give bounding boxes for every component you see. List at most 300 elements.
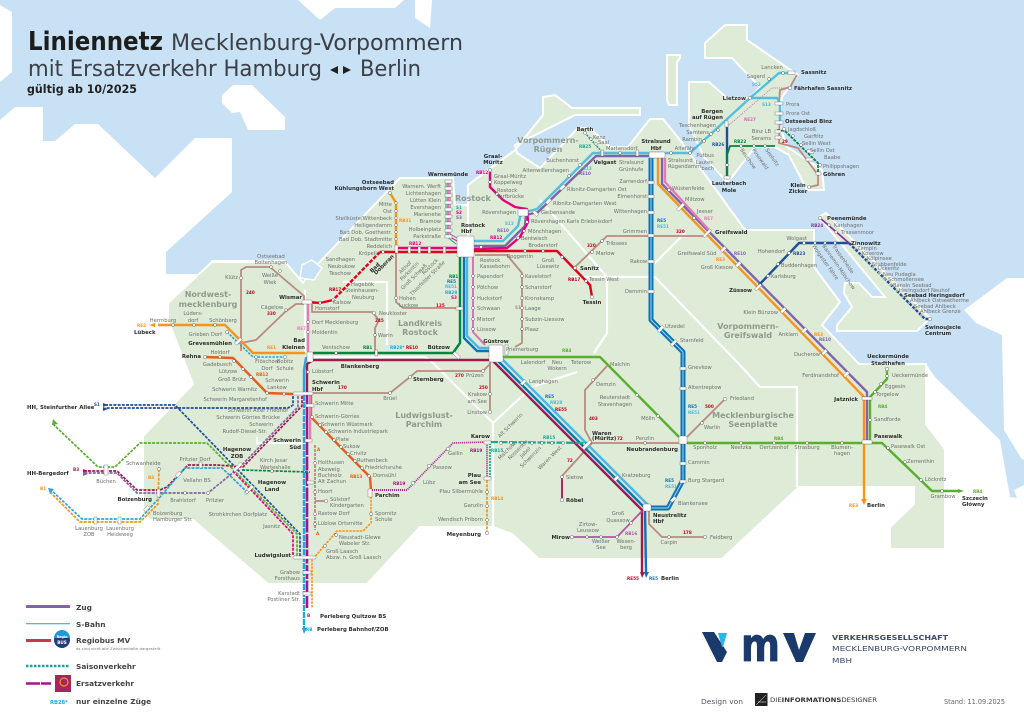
line: orange Lauenburg xyxy=(50,467,159,522)
station names: Schwerin Wüstmark xyxy=(321,422,373,428)
major station names: Zinnowitz xyxy=(851,241,881,247)
route numbers: RB4 xyxy=(562,348,571,353)
district names: Vorpommern- xyxy=(517,136,579,145)
station names: Rövershagen Karls Erlebnisdorf xyxy=(531,219,612,225)
route numbers: RB23 xyxy=(793,251,805,256)
station names: Torgelow xyxy=(875,392,900,398)
company name xyxy=(832,633,967,665)
route numbers: S13 xyxy=(762,102,771,107)
major station names: Hbf xyxy=(312,387,323,393)
major station names: Barth xyxy=(577,127,594,133)
station names: Seelvitz xyxy=(763,148,780,168)
station names: Warnem. Werft xyxy=(402,184,441,190)
line: Güstrow Neustrelitz red xyxy=(493,361,642,572)
station names: Jabel xyxy=(518,446,532,460)
major station names: Perleberg Quitzow BS xyxy=(320,614,386,620)
station names: Jeeser xyxy=(696,209,714,215)
station names: Kölpinsee xyxy=(867,256,892,262)
major station names: Bergen xyxy=(701,109,723,115)
station names: Altenwillershagen xyxy=(523,168,569,174)
major station names: HH, Steinfurther Allee xyxy=(27,405,95,411)
land: Mecklenburg-Vorpommern mainland xyxy=(143,95,945,584)
station names: Grimmen xyxy=(623,229,647,235)
station names: Utzedel xyxy=(665,324,685,330)
route numbers: 245 xyxy=(375,318,384,323)
line: Rostock Stralsund train xyxy=(474,156,649,246)
station names: Carpin xyxy=(661,540,677,546)
station names: Neetzka xyxy=(730,445,752,451)
major station names: Tessin xyxy=(583,300,602,306)
station names: Ostseebad xyxy=(257,254,285,260)
route numbers: A xyxy=(317,447,321,452)
route numbers: S13 xyxy=(505,221,514,226)
station names: Klein Bünzow xyxy=(743,310,779,316)
route numbers: S13 xyxy=(583,166,592,171)
station names: Brahlstorf xyxy=(170,498,196,504)
station names: Saal xyxy=(598,140,609,146)
station names: Graal-Müritz xyxy=(494,174,526,180)
station names: Plate xyxy=(336,437,349,443)
station names: Zarrendorf xyxy=(619,179,647,185)
major station names: Perleberg Bahnhof/ZOB xyxy=(317,627,389,633)
station names: Bansin Seebad xyxy=(893,283,932,289)
major station names: Lauterbach xyxy=(712,181,746,187)
station names: Lüssow xyxy=(477,327,497,333)
major station names: Güstrow xyxy=(483,339,509,345)
station names: Ganzlin xyxy=(464,503,483,509)
station names: Groß Schwaß xyxy=(400,262,429,291)
route numbers: RE51 xyxy=(665,484,677,489)
route numbers: RE10 xyxy=(819,337,831,342)
station names: Rostock xyxy=(497,188,517,194)
station names: Ahlbeck Grenze xyxy=(920,309,961,315)
station names: Steinhausen- xyxy=(345,288,379,294)
major station names: Parchim xyxy=(375,493,400,499)
station names: Mölln xyxy=(641,416,655,422)
route numbers: RB12 xyxy=(256,372,268,377)
station names: Zempin xyxy=(857,246,877,252)
legend: Regiobus MV: Regiobus MV xyxy=(76,636,130,645)
line: Barth xyxy=(585,133,602,152)
station names: Wiek xyxy=(264,280,276,286)
station names: Abzw. n. Groß Laasch xyxy=(326,555,381,561)
station names: Marlow xyxy=(596,251,615,257)
station names: Lübstorf xyxy=(312,369,333,375)
station names: Ahlbeck Ostseetherme xyxy=(910,298,969,304)
route numbers: 403 xyxy=(589,416,598,421)
station names: Prora xyxy=(786,102,800,108)
station names: Schwanheide xyxy=(126,461,161,467)
line: light blue Lauenburg xyxy=(50,468,247,519)
station names: Sietow xyxy=(566,475,584,481)
station names: Brüel xyxy=(383,396,397,402)
station names: Rostock xyxy=(480,258,500,264)
route numbers: 72 xyxy=(567,458,573,463)
line: Prora branch xyxy=(750,98,780,125)
major station names: Züssow xyxy=(729,288,752,294)
district names: Parchim xyxy=(406,420,442,429)
station names: Leussow xyxy=(577,528,600,534)
station names: Schwerin xyxy=(249,422,273,428)
route numbers: RE55 xyxy=(627,576,639,581)
line: Kühlungsborn xyxy=(390,193,396,247)
legend: Regiobus MV: es sind nicht alle Zwischenhalte dargestellt xyxy=(76,646,161,651)
arrows xyxy=(48,323,964,634)
route numbers: 29 xyxy=(782,139,788,144)
station names: Kindergarten xyxy=(330,503,364,509)
station names: Hohendorf xyxy=(758,249,785,255)
station names: Alt Schwerin xyxy=(497,412,524,439)
station names: Sukow xyxy=(343,444,361,450)
line: Rostock west pink xyxy=(396,247,457,249)
station names: Büchen xyxy=(96,479,116,485)
station names: Oertzenhof xyxy=(760,445,789,451)
line: Rostock west red xyxy=(380,251,457,253)
station names: Ferdinandshof xyxy=(802,373,839,379)
route numbers: RE3 xyxy=(849,503,858,508)
station names: Hornstorf xyxy=(315,306,339,312)
line: S-Bahn Rostock Stralsund xyxy=(474,73,795,241)
station names: Malchow xyxy=(497,441,518,461)
station names: Blumen- xyxy=(831,445,853,451)
line: Usedom xyxy=(759,243,849,285)
station names: Kavelstorf xyxy=(525,274,551,280)
station names: Elmenhorst xyxy=(617,194,647,200)
station names: Garftitz xyxy=(804,134,824,140)
major station names: Rostock xyxy=(461,223,486,229)
major station names: Swinoujscie xyxy=(925,325,961,331)
legend: Regiobus MV: Regio xyxy=(57,635,68,639)
station names: Pritzier Dorf xyxy=(180,457,211,463)
station names: Lalendorf xyxy=(521,360,545,366)
route numbers: RB28 xyxy=(445,290,457,295)
route numbers: RE5 xyxy=(688,404,697,409)
station names: Bad Dob. Goethestr. xyxy=(340,230,392,236)
station names: Sponholz xyxy=(693,445,717,451)
station names: Penzlin xyxy=(636,436,654,442)
district names: Rügen xyxy=(534,145,563,154)
station names: Cammin xyxy=(688,460,710,466)
major station names: am See xyxy=(459,480,481,486)
major station names: Bad xyxy=(369,262,382,274)
station names: Lancken xyxy=(761,65,783,71)
line: RE5 Stralsund Neustrelitz xyxy=(651,158,683,508)
station names: Karlshagen xyxy=(834,223,863,229)
major station names: Bützow xyxy=(428,345,450,351)
station names: Teschenhagen xyxy=(678,123,716,129)
station names: Schmollensee xyxy=(888,277,924,283)
station names: Hohen xyxy=(399,296,416,302)
station names: Gnevkow xyxy=(688,365,713,371)
station names: Sellin Ost xyxy=(810,148,835,154)
land: Usedom xyxy=(819,213,930,331)
route numbers: RE55 xyxy=(555,407,567,412)
station names: Wokern xyxy=(547,366,567,372)
line: Grieben xyxy=(227,332,285,357)
station names: Lankow xyxy=(267,385,288,391)
station names: Bad Dob. Stadtmitte xyxy=(339,237,392,243)
station names: Dorf Mecklenburg xyxy=(312,320,358,326)
station names: Posewald xyxy=(750,148,769,171)
line: Rehna xyxy=(205,357,293,394)
route numbers: RB13 xyxy=(350,474,362,479)
station names: Groß Brütz xyxy=(218,377,246,383)
route numbers: RB26 xyxy=(712,142,724,147)
station names: Wittenhagen xyxy=(614,209,647,215)
station names: Holthusen xyxy=(318,460,344,466)
station names: Plaaz xyxy=(525,327,539,333)
station names: Wesen- xyxy=(616,539,636,545)
design credit: Design von xyxy=(701,698,743,706)
route numbers: 170 xyxy=(338,385,347,390)
company name: MECKLENBURG-VORPOMMERN xyxy=(832,644,967,653)
station names: Lüblow Ortsmitte xyxy=(318,521,363,527)
route numbers: RB12 xyxy=(476,170,488,175)
station names: Tribsees xyxy=(605,241,627,247)
line: Usedom dashed xyxy=(849,243,930,319)
logo: VMV xyxy=(702,618,816,672)
route numbers: RE1 xyxy=(267,345,276,350)
route numbers: RB4 xyxy=(878,404,887,409)
title: Mecklenburg-Vorpommern xyxy=(171,31,463,56)
station names: Sagard xyxy=(747,74,765,80)
station names: Moidentin xyxy=(312,330,338,336)
station names: Kronskamp xyxy=(525,296,555,302)
station names: Pasewalk Ost xyxy=(891,444,925,450)
station names: Boltenhagen xyxy=(255,260,287,266)
station names: Schwerin Margaretenhof xyxy=(203,397,267,403)
route numbers: RE10 xyxy=(406,345,418,350)
major station names: Sternberg xyxy=(413,377,444,383)
station names: Rudolf-Diesel-Str. xyxy=(223,429,267,435)
route numbers: S3 xyxy=(456,215,462,220)
station names: Lübz xyxy=(423,480,435,486)
station names: Warteshalle xyxy=(260,465,291,471)
station names: Teterow xyxy=(570,360,592,366)
line: replacement magenta xyxy=(306,395,308,441)
major station names: ZOB xyxy=(231,454,243,460)
station names: Kenz xyxy=(593,135,606,141)
station names: Buchholz xyxy=(318,473,342,479)
title: mit Ersatzverkehr Hamburg xyxy=(28,57,322,82)
station names: Papendorf xyxy=(477,274,503,280)
route numbers: B3 xyxy=(148,475,154,480)
route numbers: RE5 xyxy=(447,279,456,284)
station names: Warlin xyxy=(704,425,720,431)
route numbers: RB22 xyxy=(734,139,746,144)
station names: Heringsdorf Neuhof xyxy=(899,288,950,294)
line: purple dotted Lübz xyxy=(372,442,487,490)
station names: Crivitz xyxy=(350,451,367,457)
route numbers: RB19 xyxy=(470,448,482,453)
station names: Scharstorf xyxy=(525,285,552,291)
line: Rostock Güstrow blue xyxy=(464,257,490,351)
route numbers: RE77 xyxy=(297,326,309,331)
line: Stralsund Greifswald pink xyxy=(665,158,709,230)
station names: Altentreptow xyxy=(688,385,722,391)
line: Lauterbach Mole xyxy=(726,123,728,177)
land: Hiddensee xyxy=(667,55,680,105)
station names: Alt Zachun xyxy=(318,479,346,485)
station names: Warin xyxy=(378,333,393,339)
line: Sassnitz dotted xyxy=(729,88,788,125)
legend xyxy=(26,603,161,706)
station names: Baabe xyxy=(824,155,840,161)
line: Bad Kleinen Güstrow xyxy=(307,360,489,392)
station names: Putbus xyxy=(696,153,714,159)
stop bars xyxy=(94,102,850,595)
station names: Wolgast xyxy=(786,236,807,242)
route numbers: RB4 xyxy=(973,489,982,494)
route numbers: 125 xyxy=(436,303,445,308)
station names: Stubbenfelde xyxy=(872,262,907,268)
station names: Gelbensande xyxy=(541,210,575,216)
station names: Feldberg xyxy=(710,535,732,541)
district names: Greifswald xyxy=(724,331,772,340)
line: Mirow xyxy=(572,511,642,537)
route numbers: RE5 xyxy=(649,576,658,581)
station names: Teschow xyxy=(328,271,352,277)
district borders xyxy=(257,185,797,527)
station names: Schönberg xyxy=(209,318,237,324)
station names: Schwaan xyxy=(477,306,500,312)
major station names: Neustrelitz xyxy=(653,513,687,519)
station names: Neuburg xyxy=(352,295,374,301)
station names: Wendisch Priborn xyxy=(438,517,483,523)
major station names: Meyenburg xyxy=(447,532,481,538)
station names: Sülstorf xyxy=(330,497,350,503)
station names: Ribnitz-Damgarten Ost xyxy=(567,187,627,193)
line: Bad Kleinen Schwerin blue xyxy=(304,356,313,392)
station names: Heideweg xyxy=(107,532,133,538)
route numbers: RB25 xyxy=(579,144,591,149)
station names: Demzin xyxy=(596,382,616,388)
station names: Dorf xyxy=(261,366,273,372)
station names: Friedrichsruhe xyxy=(365,465,402,471)
station names: Abzweig xyxy=(318,467,340,473)
station names: Greifswald Süd xyxy=(678,251,716,257)
station names: Weißer xyxy=(592,539,611,545)
major station names: Schwerin xyxy=(312,380,340,386)
line: dark red Büchen xyxy=(83,396,302,490)
station names: Broderstorf xyxy=(528,243,558,249)
station names: am See xyxy=(467,399,487,405)
station names: Rügendamm xyxy=(668,164,701,170)
station names: Pölchow xyxy=(477,285,499,291)
station names: Altefähr xyxy=(675,146,696,152)
station names: Zerrenthin xyxy=(907,459,934,465)
route numbers: S52 xyxy=(752,82,761,87)
route numbers: RE27 xyxy=(744,117,756,122)
station names: Karlsburg xyxy=(771,274,796,280)
route numbers: 320 xyxy=(676,229,685,234)
route numbers: RE10 xyxy=(497,228,509,233)
station names: Karstadt xyxy=(278,591,300,597)
station names: Eggesin xyxy=(885,384,906,390)
station names: Postliner Str. xyxy=(267,597,300,603)
line: teal Karow xyxy=(490,442,592,443)
station names: Schwerin Görries Brücke xyxy=(216,415,280,421)
station names: Schwerin Warnitz xyxy=(212,387,257,393)
line: Wismar Bad Kleinen xyxy=(307,303,309,352)
stop circles xyxy=(157,72,943,548)
design credit: DIEINFORMATIONS DESIGNER xyxy=(770,697,877,704)
route numbers: RE5 xyxy=(657,218,666,223)
station names: Wabeler Str. xyxy=(339,541,371,547)
station names: Luckow xyxy=(399,303,419,309)
station names: Seebad Ahlbeck xyxy=(914,304,956,310)
major station names: Neubrandenburg xyxy=(626,447,678,453)
station names: Flöschow xyxy=(255,359,280,365)
route numbers: RE2 xyxy=(137,323,146,328)
line: Warnemünde S1 xyxy=(446,180,456,244)
major station names: Berlin xyxy=(661,576,679,582)
route numbers: RB11 xyxy=(449,274,461,279)
station names: Buchenhorst xyxy=(546,158,579,164)
station names: ZOB xyxy=(83,532,95,538)
station names: Schule xyxy=(375,517,392,523)
line: Güstrow Neubrandenburg lime xyxy=(503,357,679,437)
route numbers: RE5 xyxy=(545,394,554,399)
date: Stand: 11.09.2025 xyxy=(944,698,1005,706)
major station names: Mole xyxy=(722,188,737,194)
station names: Marienehe xyxy=(414,212,441,218)
station names: Schwerin Mitte xyxy=(315,401,354,407)
station names: Jagdschloß xyxy=(787,127,817,133)
legend: nur einzelne Züge: nur einzelne Züge xyxy=(76,697,151,706)
station names: Evershagen xyxy=(410,205,441,211)
station names: Bramow xyxy=(420,219,442,225)
design credit xyxy=(701,693,877,706)
major station names: Hbf xyxy=(653,519,664,525)
line: Binz Göhren xyxy=(777,130,818,173)
station names: Kassebohm xyxy=(480,264,510,270)
station names: Bentwisch xyxy=(521,236,548,242)
major station names: Wismar xyxy=(279,295,302,301)
major station names: Süd xyxy=(289,445,301,451)
major station names: Karow xyxy=(471,434,490,440)
route numbers: RE51 xyxy=(688,410,700,415)
major station names: Lübeck xyxy=(134,330,156,336)
station names: Holbeinplatz xyxy=(409,227,441,233)
station names: Trassenheide xyxy=(830,243,855,275)
station names: Beuchow xyxy=(738,148,757,171)
station names: Trassenmoor xyxy=(840,230,875,236)
major station names: Hagenow xyxy=(223,447,251,453)
station names: Bannemin-Mölschow xyxy=(820,244,856,292)
station names: Quassow xyxy=(606,518,630,524)
station names: Herrnburg xyxy=(150,318,176,324)
station names: Philippshagen xyxy=(823,164,859,170)
station names: Groß xyxy=(612,511,625,517)
station names: Lichtenhagen xyxy=(406,191,441,197)
major station names: (Müritz) xyxy=(592,436,616,442)
major station names: Kühlungsborn West xyxy=(335,186,394,192)
route numbers: S1 xyxy=(515,305,521,310)
station names: Steilküste/Wittenbeck xyxy=(335,216,392,222)
station names: Boizenburg xyxy=(153,511,182,517)
station names: Ueckermünde xyxy=(892,373,928,379)
station names: Rövershagen xyxy=(482,210,516,216)
route numbers: S2 xyxy=(456,210,462,215)
legend: Saisonverkehr: Saisonverkehr xyxy=(76,662,136,671)
major station names: Graal- xyxy=(484,154,502,160)
line: teal Plau xyxy=(489,443,491,477)
title: gültig ab 10/2025 xyxy=(27,82,137,96)
station names: Lauenburg xyxy=(106,526,134,532)
station names: bach xyxy=(701,166,714,172)
station names: Plau Silbermühle xyxy=(439,489,483,495)
